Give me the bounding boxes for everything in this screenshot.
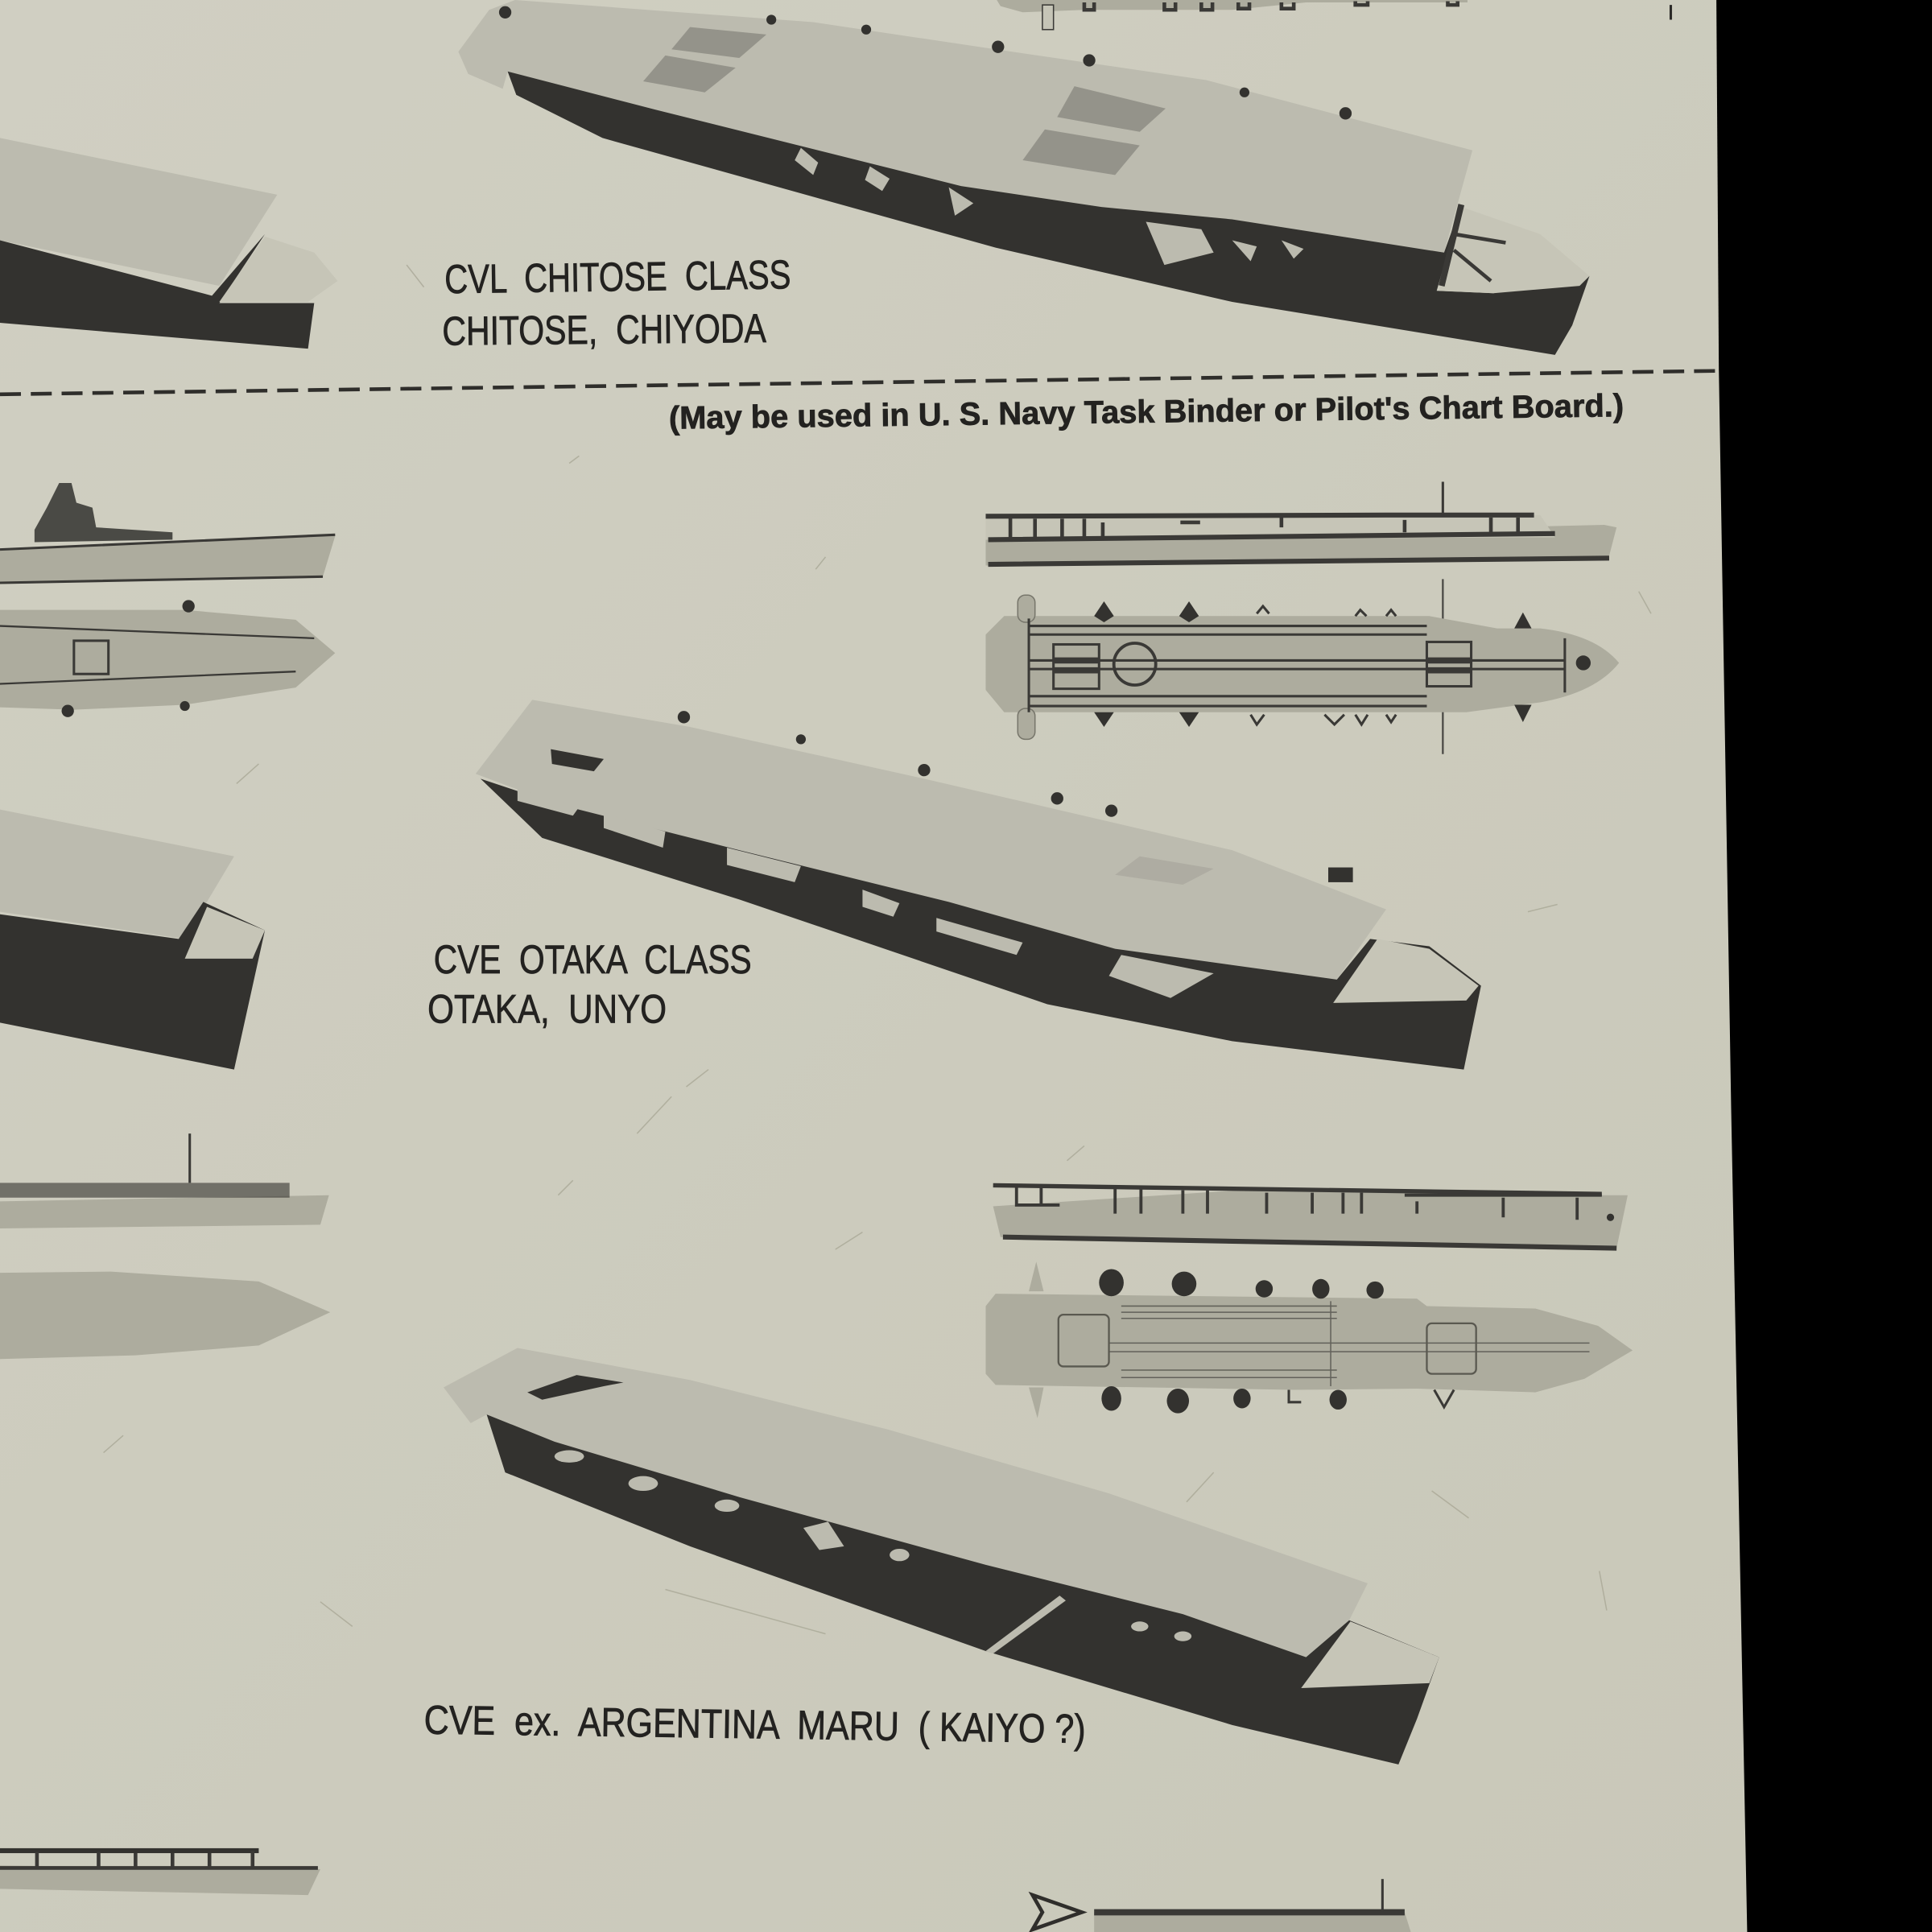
bow bulwark stripe xyxy=(1442,204,1461,286)
mast xyxy=(1381,1879,1383,1913)
hull xyxy=(0,1195,329,1228)
deck xyxy=(985,1294,1633,1393)
left plan view 2 xyxy=(0,1272,330,1359)
gun tubs xyxy=(678,711,1353,882)
dashed cut line xyxy=(0,371,1716,394)
mast line xyxy=(1442,579,1443,754)
deck recess xyxy=(527,1375,623,1400)
flight deck xyxy=(0,810,234,939)
top partial ship plan view xyxy=(997,0,1672,30)
left side view 2 xyxy=(0,1133,329,1228)
elevator stripes xyxy=(1054,660,1099,671)
flight deck xyxy=(0,138,277,286)
left plan view 1 xyxy=(0,600,335,717)
front elevator xyxy=(1426,642,1472,687)
bow gun xyxy=(1607,1214,1614,1221)
small tubs xyxy=(1251,606,1396,724)
deck gun sponsons xyxy=(499,6,1352,119)
bow deck xyxy=(185,907,265,959)
side openings xyxy=(518,789,1214,998)
mast xyxy=(189,1133,191,1183)
deck xyxy=(0,610,335,710)
gallery xyxy=(0,1183,290,1198)
front elevator xyxy=(1426,1323,1476,1374)
partial hull xyxy=(997,0,1468,12)
hull openings xyxy=(795,148,1303,265)
gallery xyxy=(0,1848,258,1853)
supports xyxy=(1017,1185,1602,1220)
bow deck xyxy=(1333,939,1479,1003)
mast xyxy=(1442,481,1443,515)
deck lines xyxy=(0,626,314,683)
left ship 2 oblique fragment xyxy=(0,810,265,1070)
ship: Argentina side view xyxy=(993,1185,1628,1249)
rear elevator xyxy=(1059,1315,1109,1366)
left side view 1 xyxy=(0,483,335,584)
hull xyxy=(481,778,1481,1070)
flight deck xyxy=(458,0,1472,253)
hull xyxy=(0,536,335,584)
superstructure xyxy=(985,515,1555,539)
hull and superstructure xyxy=(1094,1913,1411,1932)
triangle pointer xyxy=(1033,1895,1082,1930)
deck line xyxy=(985,515,1609,564)
flight deck xyxy=(444,1348,1368,1657)
bow gun xyxy=(1576,655,1591,671)
label: CVL Chitose class: CVL CHITOSE CLASS xyxy=(444,251,791,302)
deck xyxy=(985,616,1619,712)
bottom partial ship xyxy=(1033,1879,1411,1932)
gallery details xyxy=(0,1851,318,1869)
ship: Argentina Maru oblique xyxy=(444,1348,1439,1765)
ship: Otaka oblique xyxy=(476,700,1481,1070)
gun blobs xyxy=(1094,601,1532,727)
deck lines xyxy=(1029,618,1565,712)
hull xyxy=(0,1865,320,1895)
deck lines xyxy=(0,535,335,583)
note: task binder: (May be used in U. S. Navy Task Binder or Pilot's Chart Board.) xyxy=(669,388,1624,436)
deck line xyxy=(1094,1910,1405,1914)
deck lines xyxy=(1109,1301,1589,1386)
label: CVE Otaka class xyxy=(427,936,752,1031)
stern booms xyxy=(1029,1261,1043,1418)
front stripes xyxy=(1426,660,1472,671)
label: CVE ex. Argentina Maru: CVE ex. ARGENTINA MARU ( KAIYO ?) xyxy=(423,1697,1086,1752)
label: CVE Otaka class: CVE OTAKA CLASS xyxy=(434,936,752,982)
paper fibres xyxy=(104,265,1651,1634)
hull openings xyxy=(555,1451,1191,1653)
flight deck xyxy=(476,700,1386,980)
ship: Otaka plan view xyxy=(985,579,1619,754)
registration tick xyxy=(1670,5,1672,19)
hull xyxy=(0,902,265,1070)
rear elevator xyxy=(1054,645,1099,689)
anchor gear xyxy=(1454,234,1505,281)
hull xyxy=(487,1414,1439,1765)
deck circle marking xyxy=(1114,643,1156,685)
flight deck line xyxy=(993,1185,1602,1194)
hull xyxy=(993,1191,1628,1249)
left side view 3 xyxy=(0,1848,320,1895)
blobs xyxy=(62,600,195,717)
small sponsons xyxy=(1289,1390,1454,1407)
hull xyxy=(0,234,314,349)
ship: Otaka side view xyxy=(985,481,1616,566)
label: Chitose, Chiyoda: CHITOSE, CHIYODA xyxy=(442,305,766,354)
faint deck patch xyxy=(1115,857,1214,885)
gun tubs xyxy=(1099,1269,1384,1414)
ship: Argentina plan view xyxy=(985,1261,1633,1418)
bow deck xyxy=(1301,1621,1439,1688)
black backdrop edge xyxy=(1716,0,1932,1932)
stern booms xyxy=(1018,595,1035,739)
waterline xyxy=(1003,1237,1616,1249)
bow deck xyxy=(1439,207,1589,293)
hull xyxy=(985,525,1616,566)
island xyxy=(35,483,172,542)
gun tubs xyxy=(1084,2,1458,10)
hull xyxy=(508,72,1589,355)
left ship 1 oblique fragment xyxy=(0,138,337,349)
deck patches xyxy=(643,27,1166,175)
elevator xyxy=(74,641,109,674)
deck recess xyxy=(551,749,604,771)
label: CVL Chitose class xyxy=(442,251,791,354)
ship: CVL Chitose oblique xyxy=(458,0,1589,355)
peg xyxy=(1042,5,1054,30)
label: Otaka, Unyo: OTAKA, UNYO xyxy=(427,985,667,1031)
bow deck xyxy=(219,237,337,302)
gallery supports xyxy=(1010,518,1518,539)
